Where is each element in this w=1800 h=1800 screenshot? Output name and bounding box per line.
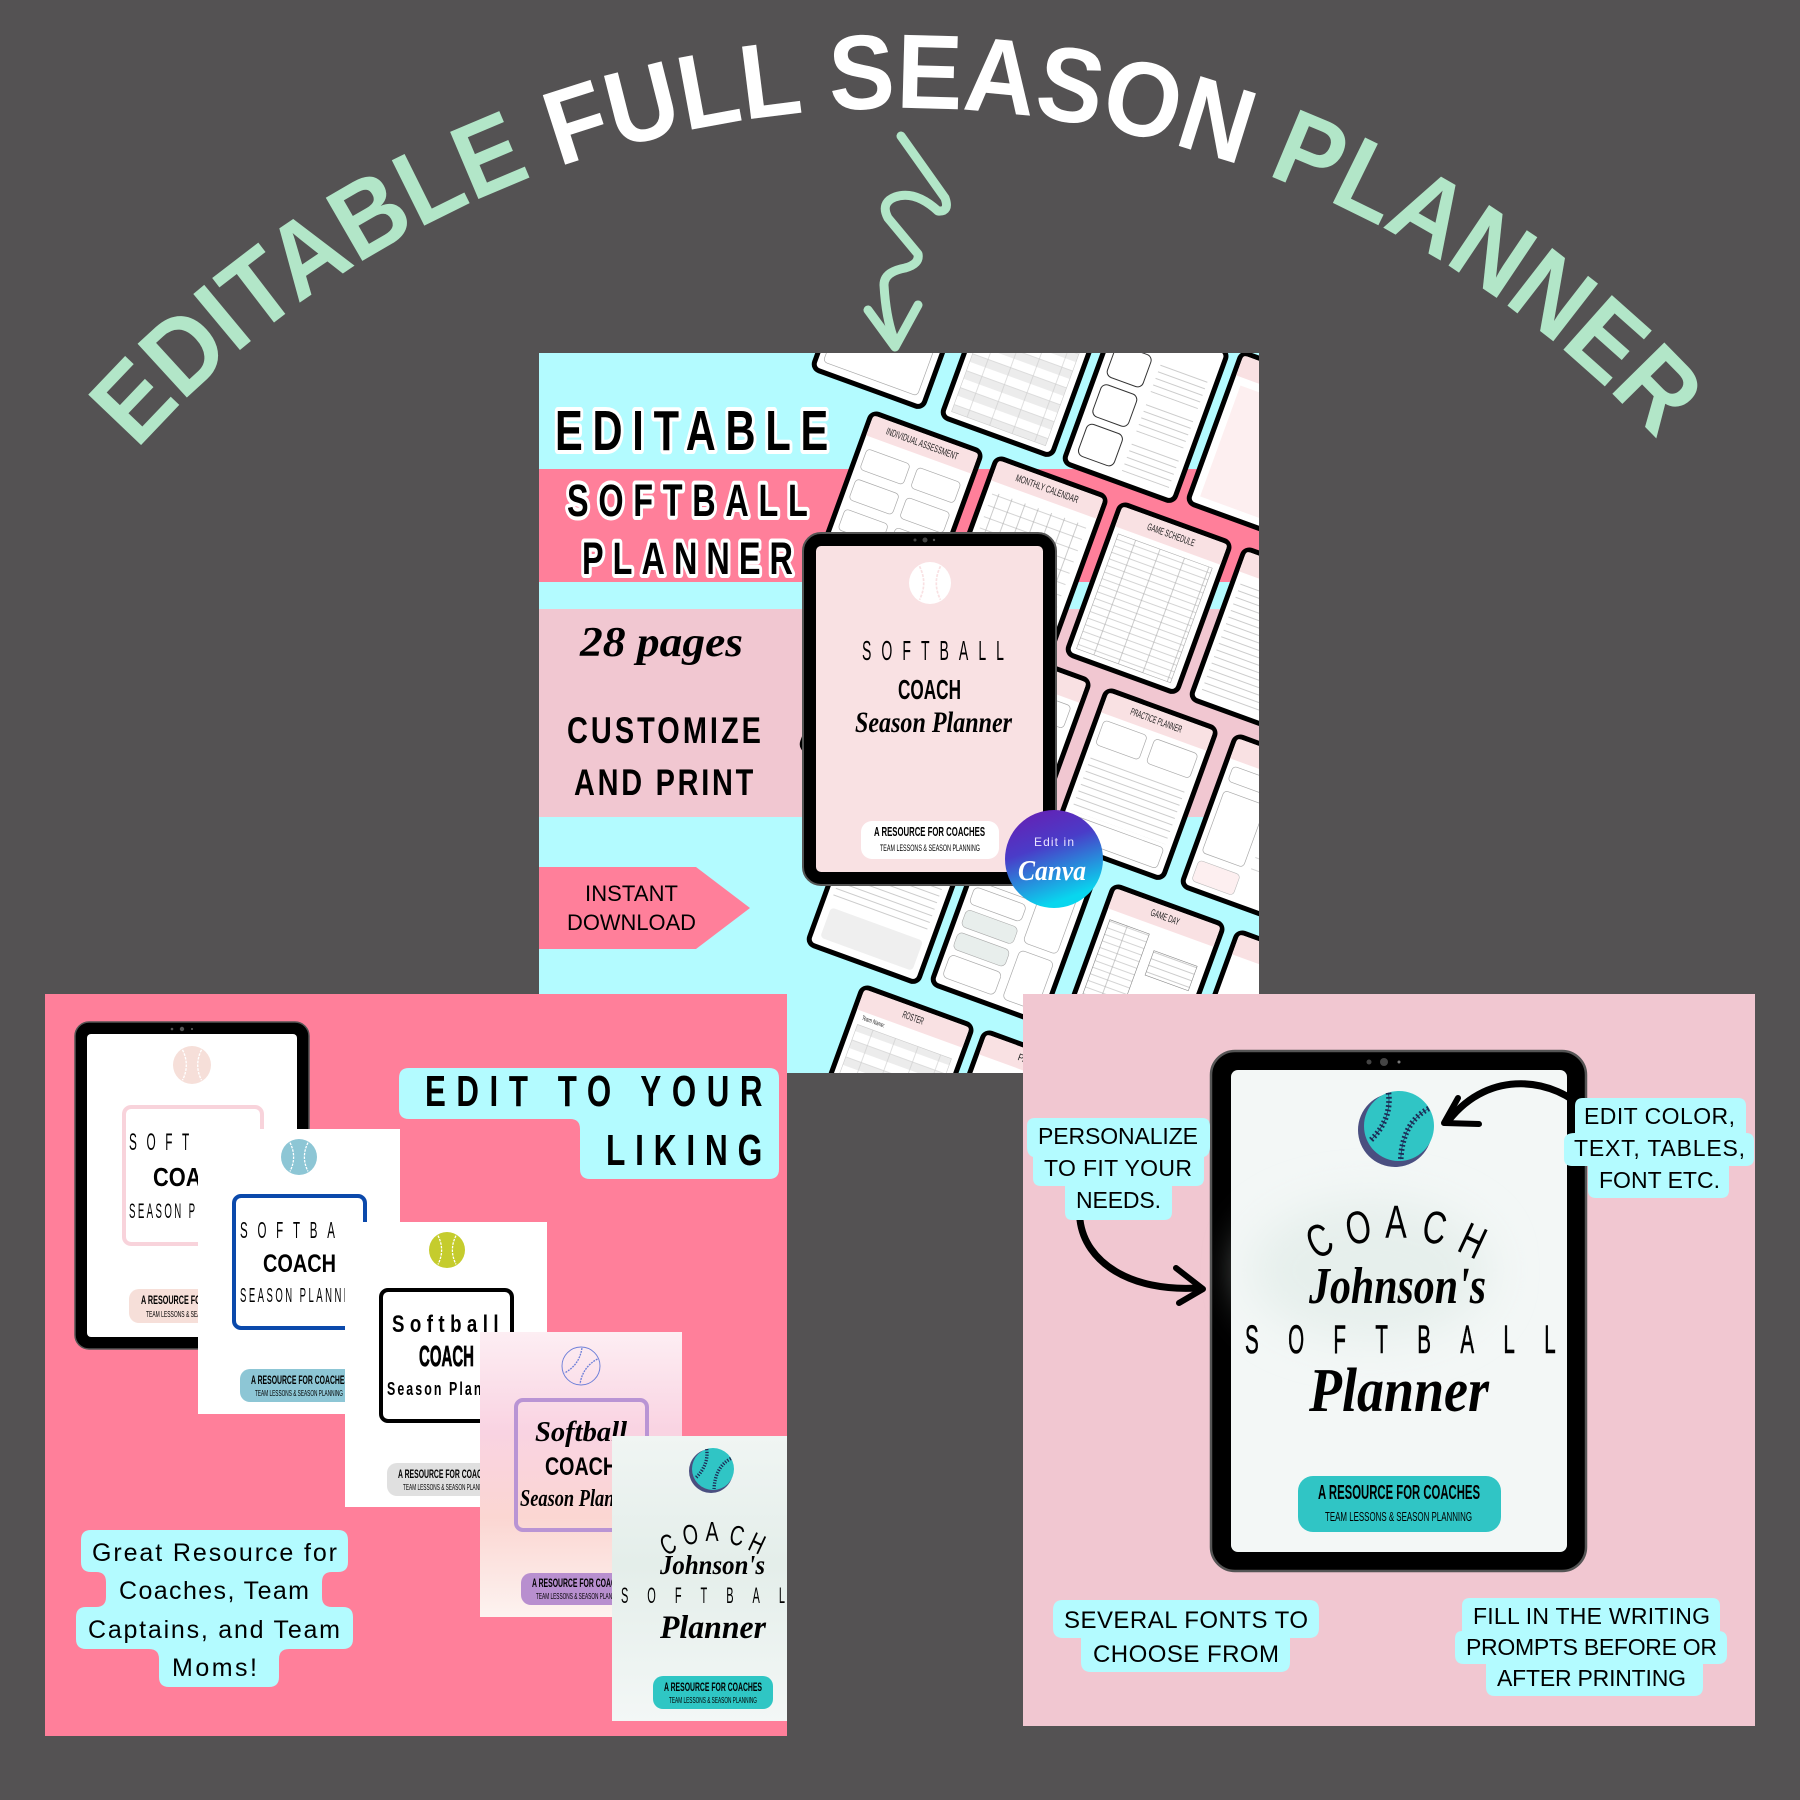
page: individual assessment bbox=[826, 412, 982, 532]
page: game schedule: GAME SCHEDULE bbox=[1146, 522, 1196, 549]
tablet: coach johnson's softball planner: C bbox=[1298, 1213, 1341, 1269]
arrow: personalize to tablet bbox=[1080, 1220, 1203, 1303]
card: watercolor mint coach johnson: C bbox=[727, 1520, 747, 1553]
page: practice planner: PRACTICE PLANNER bbox=[1129, 707, 1183, 736]
card: black frame bbox=[345, 1222, 547, 1507]
icon: teal softball bbox=[1358, 1091, 1434, 1167]
callout: personalize: PERSONALIZE bbox=[1038, 1123, 1198, 1149]
tablet: white cover, pink frame bbox=[75, 1022, 309, 1349]
card: watercolor mint coach johnson: A RESOURCE FOR COACHES bbox=[664, 1680, 762, 1694]
badge: instant download bbox=[539, 867, 750, 949]
tablet: softball coach season planner: TEAM LESSONS & SEASON PLANNING bbox=[880, 843, 980, 853]
callout: fill in the writing prompts: PROMPTS BEFORE OR bbox=[1466, 1634, 1717, 1660]
badge: edit in canva bbox=[1005, 810, 1103, 908]
tablet: coach johnson's softball planner: Johnson's bbox=[1308, 1258, 1486, 1315]
tablet: coach johnson's softball planner: H bbox=[1451, 1213, 1494, 1269]
callout: personalize bbox=[1027, 1118, 1210, 1220]
tablet: coach johnson's softball planner: C bbox=[1419, 1201, 1450, 1255]
text: SOFTBALL bbox=[621, 1583, 829, 1608]
callout: great resource: Captains, and Team bbox=[88, 1616, 340, 1644]
tablet: coach johnson's softball planner: A RESOURCE FOR COACHES bbox=[1318, 1482, 1480, 1504]
tablet: white cover, pink frame: SOFTBALL bbox=[129, 1129, 266, 1156]
text: and print: AND PRINT bbox=[574, 762, 756, 803]
callout: fill in the writing prompts bbox=[1455, 1598, 1727, 1696]
card: watercolor mint coach johnson: Planner bbox=[659, 1610, 767, 1646]
tablet: softball coach season planner bbox=[803, 533, 1056, 885]
page: parent bbox=[967, 1030, 1023, 1073]
callout: great resource: Moms! bbox=[172, 1654, 257, 1682]
arrow: squiggle pointing to planner bbox=[868, 136, 946, 347]
card: blue frame: COACH bbox=[263, 1250, 336, 1278]
callout: edit to your liking: LIKING bbox=[606, 1126, 772, 1175]
card: black frame: Season Planner bbox=[387, 1379, 509, 1399]
heading: planner: PLANNER bbox=[582, 533, 802, 584]
tablet: white cover, pink frame: COACH bbox=[153, 1162, 233, 1192]
card: watercolor mint coach johnson bbox=[612, 1436, 787, 1721]
tablet: coach johnson's softball planner bbox=[1211, 1051, 1586, 1571]
tablet: softball coach season planner: SOFTBALL bbox=[862, 635, 1014, 666]
page: practice planner bbox=[1052, 689, 1217, 879]
badge: edit in canva: Edit in bbox=[1034, 835, 1074, 849]
card: black frame: A RESOURCE FOR COACHES bbox=[398, 1467, 496, 1481]
panel: customization details bbox=[1023, 994, 1755, 1726]
card: watercolor mint coach johnson: H bbox=[744, 1527, 770, 1561]
heading: editable: EDITABLE bbox=[555, 399, 838, 463]
page: game day: GAME DAY bbox=[1149, 908, 1181, 928]
card: watercolor pink: COACH bbox=[545, 1453, 617, 1481]
callout: great resource: Coaches, Team bbox=[119, 1577, 309, 1605]
text: customize: CUSTOMIZE bbox=[567, 710, 764, 751]
arrow: edit color to ball bbox=[1444, 1084, 1587, 1124]
callout: several fonts bbox=[1053, 1600, 1319, 1672]
callout: edit color text tables bbox=[1564, 1098, 1754, 1198]
callout: edit color text tables: FONT ETC. bbox=[1599, 1167, 1720, 1193]
card: blue frame: A RESOURCE FOR COACHES bbox=[251, 1373, 349, 1387]
card: watercolor pink: A RESOURCE FOR COACHES bbox=[532, 1576, 630, 1590]
callout: edit to your liking: EDIT TO YOUR bbox=[425, 1067, 773, 1116]
tilted worksheet pages bbox=[800, 353, 1259, 1073]
card: watercolor mint coach johnson: Johnson's bbox=[659, 1550, 765, 1580]
card: watercolor mint coach johnson: O bbox=[680, 1519, 701, 1552]
tablet: coach johnson's softball planner: TEAM LESSONS & SEASON PLANNING bbox=[1325, 1509, 1472, 1524]
card: watercolor pink bbox=[480, 1332, 682, 1617]
card: blue frame: SOFTBALL bbox=[240, 1217, 377, 1243]
card: blue frame: TEAM LESSONS & SEASON PLANNING bbox=[255, 1389, 343, 1398]
tablet: coach johnson's softball planner: Planner bbox=[1308, 1357, 1490, 1425]
callout: edit to your liking bbox=[399, 1067, 779, 1179]
page: game day bbox=[1072, 884, 1224, 994]
card: watercolor mint coach johnson: A bbox=[705, 1517, 719, 1548]
callout: several fonts: SEVERAL FONTS TO bbox=[1064, 1607, 1308, 1634]
card: watercolor mint coach johnson: C bbox=[655, 1528, 681, 1562]
tablet: white cover, pink frame: A RESOURCE FOR COACHES bbox=[141, 1293, 244, 1307]
page: roster: Team Name: bbox=[861, 1015, 886, 1030]
page: monthly calendar: MONTHLY CALENDAR bbox=[1014, 473, 1080, 506]
light pink band bbox=[539, 609, 1259, 817]
card: watercolor mint coach johnson: TEAM LESSONS & SEASON PLANNING bbox=[669, 1696, 757, 1705]
card: black frame: COACH bbox=[419, 1341, 474, 1373]
panel: edit to your liking bbox=[45, 994, 829, 1736]
badge: instant download: DOWNLOAD bbox=[567, 910, 696, 935]
page: roster: ROSTER bbox=[901, 1010, 925, 1027]
callout: personalize: NEEDS. bbox=[1076, 1187, 1161, 1213]
page: game schedule bbox=[1066, 503, 1231, 693]
card: blue frame bbox=[198, 1129, 400, 1414]
tablet: softball coach season planner: COACH bbox=[898, 674, 961, 705]
pink band bbox=[539, 469, 1259, 582]
callout: fill in the writing prompts: AFTER PRINTING bbox=[1497, 1665, 1686, 1691]
callout: great resource bbox=[76, 1530, 353, 1687]
panel: main planner preview bbox=[539, 353, 1259, 1073]
heading: softball: SOFTBALL bbox=[567, 475, 818, 526]
callout: edit color text tables: EDIT COLOR, bbox=[1584, 1103, 1735, 1129]
page: roster bbox=[828, 986, 974, 1073]
tablet: white cover, pink frame: TEAM LESSONS & SEASON PLANNING bbox=[146, 1310, 238, 1319]
tablet: coach johnson's softball planner: O bbox=[1342, 1201, 1375, 1255]
card: watercolor pink: TEAM LESSONS & SEASON PLANNING bbox=[536, 1592, 624, 1601]
page: monthly calendar bbox=[967, 456, 1108, 642]
tablet: softball coach season planner: Season Planner bbox=[855, 706, 1012, 739]
card: blue frame: SEASON PLANNER bbox=[240, 1285, 362, 1307]
text: 28 pages: 28 pages bbox=[579, 620, 743, 666]
callout: fill in the writing prompts: FILL IN THE WRITING bbox=[1473, 1603, 1710, 1629]
card: black frame: Softball bbox=[392, 1311, 504, 1338]
tablet: coach johnson's softball planner: A bbox=[1385, 1197, 1407, 1248]
callout: great resource: Great Resource for bbox=[92, 1539, 337, 1567]
card: watercolor pink: Softball bbox=[535, 1417, 627, 1448]
badge: instant download: INSTANT bbox=[585, 881, 678, 906]
card: watercolor pink: Season Planner bbox=[520, 1486, 641, 1512]
badge: edit in canva: Canva bbox=[1018, 855, 1086, 887]
callout: personalize: TO FIT YOUR bbox=[1044, 1155, 1192, 1181]
tablet: softball coach season planner: A RESOURCE FOR COACHES bbox=[874, 824, 985, 839]
page: parent: PARENT bbox=[1016, 1052, 1052, 1074]
card: black frame: TEAM LESSONS & SEASON PLANNING bbox=[403, 1483, 491, 1492]
callout: several fonts: CHOOSE FROM bbox=[1093, 1641, 1279, 1668]
callout: edit color text tables: TEXT, TABLES, bbox=[1574, 1135, 1745, 1161]
tablet: white cover, pink frame: SEASON PLANNER bbox=[129, 1200, 251, 1223]
title: editable full season planner: EDITABLE FULL SEASON PLANNER bbox=[88, 34, 1698, 445]
page: individual assessment: INDIVIDUAL ASSESSMENT bbox=[884, 426, 959, 463]
